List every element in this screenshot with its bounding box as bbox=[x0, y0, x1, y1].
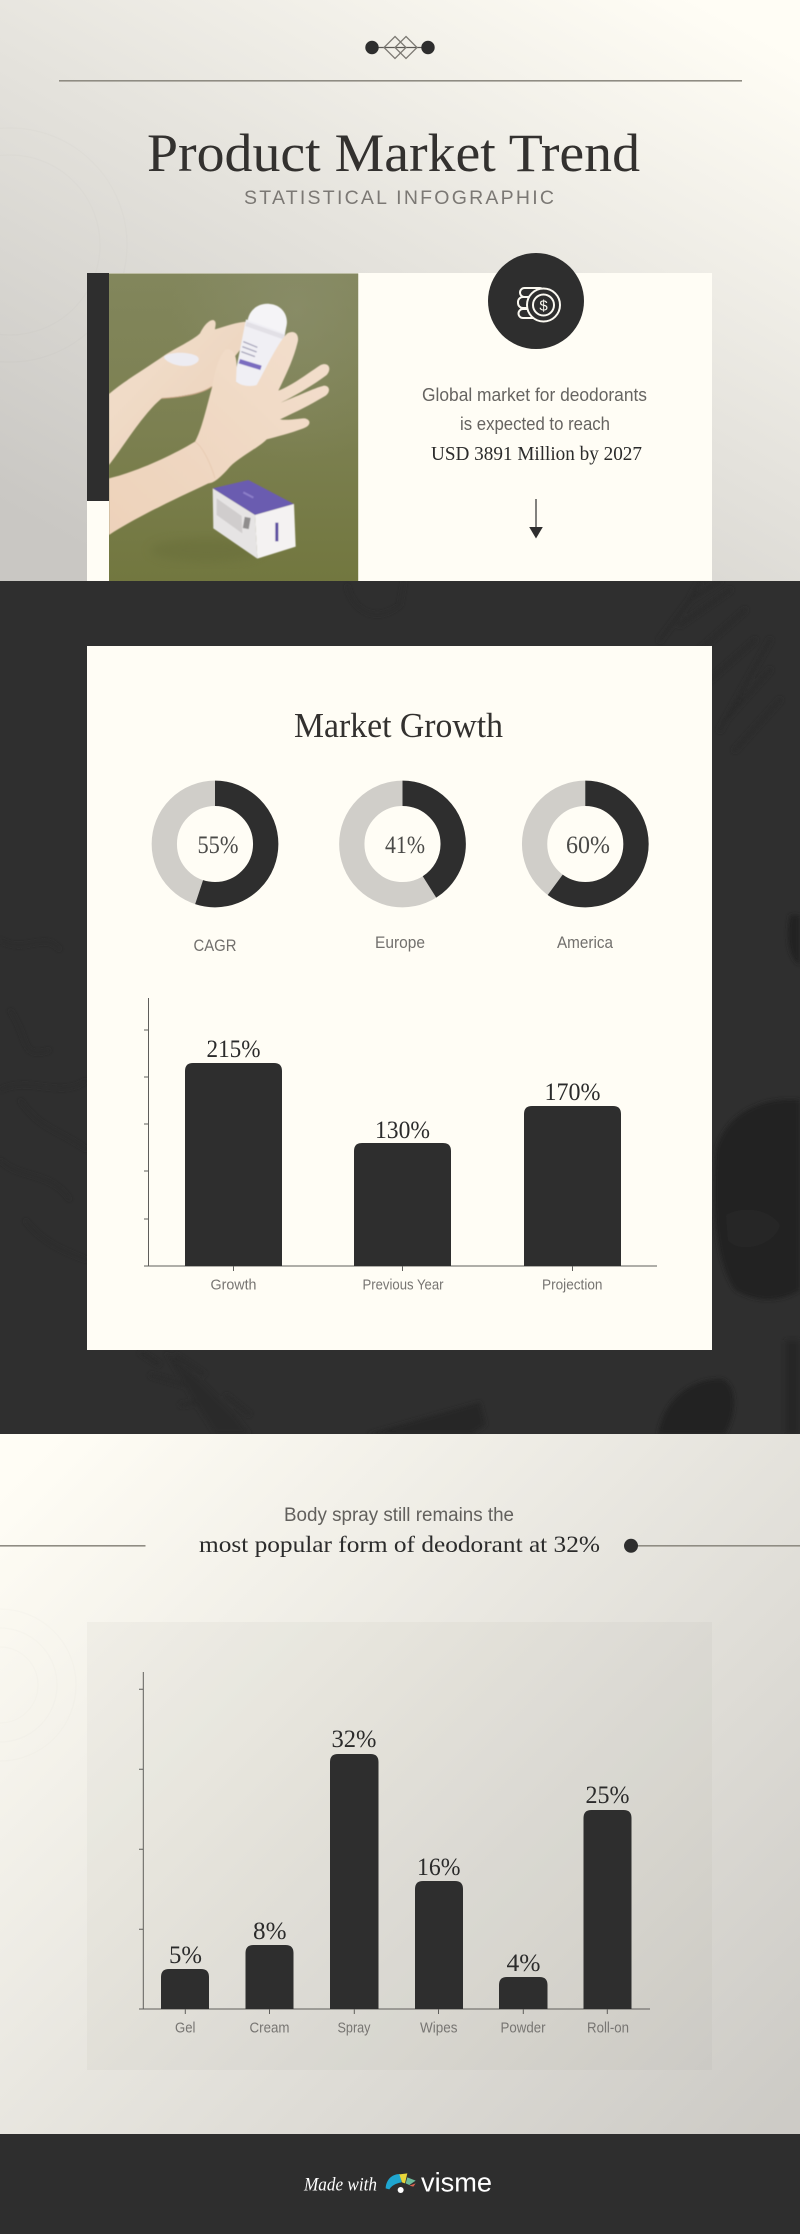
donut: CAGR 55% bbox=[164, 793, 266, 955]
donut: America 60% bbox=[535, 793, 636, 952]
donut: America 60%: America bbox=[557, 933, 613, 952]
bar chart: deodorant forms: 8% bbox=[253, 1918, 286, 1945]
bar chart: growth: 215% bbox=[206, 1036, 260, 1063]
ornament: dots and diamonds bbox=[365, 36, 435, 58]
panel: intro card bbox=[87, 253, 712, 581]
arrow: down bbox=[529, 499, 543, 538]
icon: visme logo bbox=[386, 2173, 416, 2193]
bar chart: deodorant forms: 32% bbox=[332, 1726, 376, 1753]
made with: Made with bbox=[303, 2174, 377, 2196]
bar chart: growth: Projection bbox=[542, 1278, 602, 1294]
lower section background bbox=[0, 1434, 800, 2134]
intro text bbox=[422, 385, 647, 465]
bar chart: deodorant forms: Cream bbox=[250, 2020, 290, 2036]
donut: CAGR 55%: 55% bbox=[198, 832, 238, 859]
bar chart: growth: Growth bbox=[210, 1278, 256, 1294]
visme wordmark: visme bbox=[421, 2168, 492, 2198]
panel: product form chart bbox=[87, 1622, 712, 2070]
intro text: Global market for deodorants bbox=[422, 385, 647, 405]
bar chart: deodorant forms: Spray bbox=[338, 2020, 371, 2036]
photo: hands with roll-on deodorant bbox=[109, 273, 358, 581]
dark section background bbox=[0, 581, 800, 1434]
donut: Europe 41%: Europe bbox=[375, 933, 425, 952]
icon: coin stack badge bbox=[488, 253, 584, 349]
donut: Europe 41% bbox=[352, 793, 453, 952]
intro text: is expected to reach bbox=[460, 414, 610, 434]
callout: body spray: most popular form of deodorant at 32% bbox=[199, 1532, 600, 1557]
bar chart: deodorant forms: 5% bbox=[169, 1942, 202, 1969]
heading: market growth: Market Growth bbox=[294, 706, 503, 745]
bar chart: deodorant forms: Powder bbox=[500, 2020, 546, 2036]
bar chart: growth: 130% bbox=[375, 1117, 430, 1144]
bar chart: deodorant forms: Gel bbox=[175, 2020, 196, 2036]
panel: market growth card bbox=[87, 646, 712, 1350]
subtitle: STATISTICAL INFOGRAPHIC bbox=[244, 187, 554, 209]
bar chart: deodorant forms: Roll-on bbox=[587, 2020, 629, 2036]
icon: coin stack badge: $ bbox=[539, 298, 548, 314]
callout: body spray: Body spray still remains the bbox=[284, 1505, 514, 1526]
intro text: USD 3891 Million by 2027 bbox=[431, 443, 642, 465]
bar chart: deodorant forms: 25% bbox=[586, 1782, 630, 1809]
header rule bbox=[59, 80, 742, 82]
donut: Europe 41%: 41% bbox=[385, 832, 425, 859]
bar chart: growth: Previous Year bbox=[362, 1278, 444, 1294]
bar chart: deodorant forms: Wipes bbox=[420, 2020, 458, 2036]
bar chart: growth bbox=[144, 998, 657, 1294]
footer bar bbox=[0, 2134, 800, 2234]
bar chart: deodorant forms: 4% bbox=[506, 1950, 540, 1977]
donut: America 60%: 60% bbox=[566, 832, 610, 859]
bar chart: growth: 170% bbox=[544, 1079, 600, 1106]
title: Product Market Trend bbox=[147, 123, 640, 183]
donut: CAGR 55%: CAGR bbox=[194, 936, 236, 955]
callout: body spray bbox=[0, 1505, 800, 1557]
bar chart: deodorant forms: 16% bbox=[417, 1854, 460, 1881]
bar chart: deodorant forms bbox=[139, 1672, 650, 2036]
top section background bbox=[0, 0, 800, 581]
